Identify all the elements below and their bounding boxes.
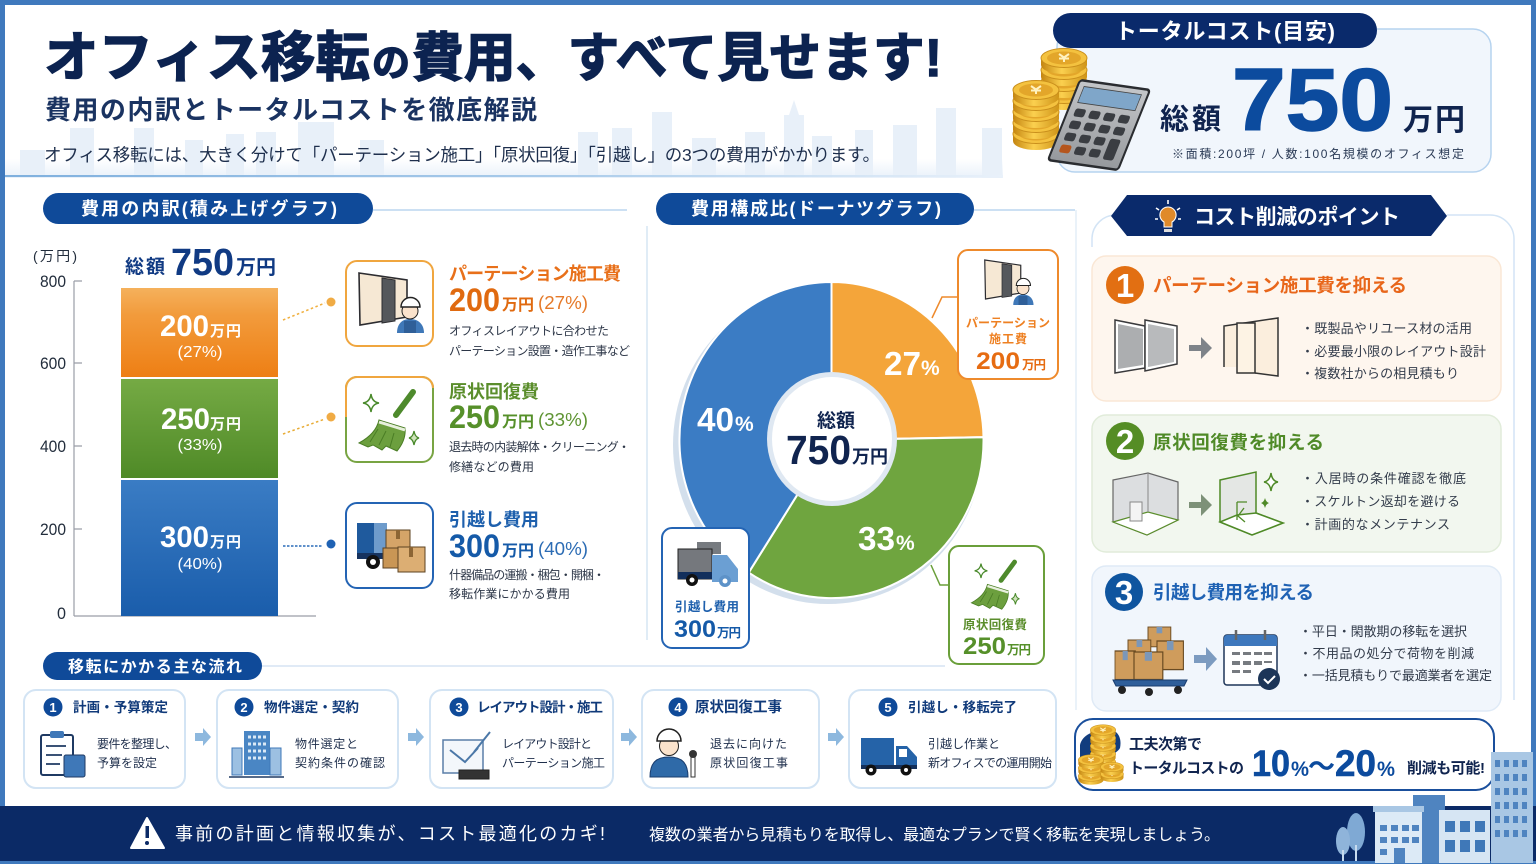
callout: 10 to 20 percent savings: 工夫次第で	[1129, 735, 1202, 753]
donut center total: 万円	[852, 447, 888, 467]
icon: calculator	[1048, 80, 1150, 170]
tip 2: restoration: ・スケルトン返却を避ける	[1301, 494, 1460, 509]
title	[44, 28, 942, 88]
donut center total	[786, 410, 888, 473]
footer bar: 複数の業者から見積もりを取得し、最適なプランで賢く移転を実現しましょう。	[649, 826, 1220, 844]
callout: 10 to 20 percent savings: %	[1291, 758, 1309, 781]
donut label 40%	[697, 401, 754, 438]
bar: restoration 250: 250	[161, 403, 210, 436]
title: オフィス移転	[44, 28, 370, 88]
chart axis	[33, 248, 316, 623]
callout: restoration: 250	[963, 633, 1006, 660]
donut label 33%: 33	[858, 520, 895, 557]
tip 3: moving: ・平日・閑散期の移転を選択	[1299, 624, 1467, 639]
flow step 2: 物件選定と	[295, 737, 358, 751]
icon: boxes on cart	[1113, 627, 1187, 696]
flow step 3	[430, 690, 613, 788]
icon: blueprint	[443, 732, 490, 779]
callout: moving: 300	[674, 616, 716, 643]
callout: partition	[932, 250, 1058, 379]
tip 3: moving	[1092, 566, 1501, 711]
donut center total: 750	[786, 427, 851, 473]
icon: worker	[650, 729, 697, 777]
donut center total: 総額	[817, 410, 855, 432]
icon: truck and boxes	[346, 503, 433, 588]
total cost heading pill: トータルコスト(目安)	[1115, 19, 1335, 44]
panel: total cost	[1013, 13, 1491, 172]
flow step 2: 物件選定・契約	[264, 699, 359, 715]
item: restoration cost: 修繕などの費用	[449, 459, 534, 474]
chart axis: 400	[40, 437, 66, 456]
flow step 2	[217, 690, 398, 788]
callout: partition: 200	[976, 348, 1020, 375]
callout: 10 to 20 percent savings: 10	[1252, 743, 1290, 784]
tip 2: restoration	[1092, 415, 1501, 552]
item: moving cost: (40%)	[538, 539, 588, 559]
item: moving cost: 300	[449, 528, 500, 564]
item: moving cost	[346, 503, 605, 601]
donut label 33%: %	[896, 532, 915, 555]
flow step 5: 5	[884, 700, 892, 715]
donut chart	[673, 282, 984, 604]
tip 1: partition: パーテーション施工費を抑える	[1153, 275, 1407, 296]
icon: coins	[1013, 48, 1087, 150]
callout: moving: 万円	[717, 626, 741, 640]
tip 1: partition: ・複数社からの相見積もり	[1301, 366, 1459, 381]
bar: moving 300: (40%)	[178, 556, 222, 573]
callout: 10 to 20 percent savings: トータルコストの	[1129, 760, 1244, 777]
flow step 1: 計画・予算策定	[73, 699, 168, 715]
stacked bar chart	[33, 242, 316, 623]
bar: restoration 250: 万円	[210, 416, 241, 433]
icon: arrow	[1194, 647, 1217, 671]
item: restoration cost: 原状回復費	[449, 382, 539, 402]
item: restoration cost: (33%)	[538, 410, 588, 430]
tip 1: partition: 1	[1116, 267, 1134, 304]
chart total: 750	[171, 242, 234, 284]
callout: restoration: 万円	[1007, 643, 1031, 657]
icon: coin stacks	[1078, 725, 1124, 785]
chart axis: 200	[40, 520, 66, 539]
tip 3: moving: 引越し費用を抑える	[1153, 582, 1314, 603]
flow step 3: レイアウト設計・施工	[477, 699, 603, 715]
icon: door and worker	[346, 261, 433, 346]
bar: restoration 250: (33%)	[178, 437, 222, 454]
item: partition cost: パーテーション施工費	[449, 264, 621, 284]
bar: restoration 250	[121, 379, 278, 478]
callout: partition: パーテーション	[966, 316, 1050, 330]
panel: cost reduction points	[1092, 195, 1514, 711]
footer bar: 事前の計画と情報収集が、コスト最適化のカギ!	[175, 824, 605, 844]
intro text: オフィス移転には、大きく分けて「パーテーション施工」「原状回復」「引越し」の3つの費用がかかります。	[44, 145, 880, 165]
bar: partition 200	[121, 288, 278, 377]
icon: panels to door	[1115, 318, 1278, 376]
item: moving cost: 引越し費用	[449, 510, 539, 530]
callout: restoration: 原状回復費	[963, 617, 1027, 632]
flow step 1: 要件を整理し、	[97, 737, 177, 751]
bar: partition 200: 万円	[210, 323, 241, 340]
tip 3: moving: ・一括見積もりで最適業者を選定	[1299, 668, 1492, 683]
tip 3: moving: ・不用品の処分で荷物を削減	[1299, 646, 1474, 661]
flow step 1: 1	[49, 700, 57, 715]
item: moving cost: 什器備品の運搬・梱包・開梱・	[449, 567, 605, 582]
footer city illustration	[1336, 752, 1533, 863]
callout: moving	[662, 528, 749, 648]
item: partition cost	[346, 261, 630, 358]
callout: 10 to 20 percent savings: 削減も可能!	[1407, 759, 1485, 777]
callout: 10 to 20 percent savings: %	[1377, 758, 1395, 781]
donut label 27%: %	[921, 357, 940, 380]
item: partition cost: パーテーション設置・造作工事など	[449, 344, 630, 358]
tip 2: restoration: 原状回復費を抑える	[1153, 432, 1324, 453]
chart total: 万円	[236, 257, 276, 279]
chart axis: 0	[57, 604, 66, 623]
chart axis: 600	[40, 354, 66, 373]
chart axis: (万円)	[33, 248, 77, 264]
icon: truck	[861, 738, 917, 776]
flow arrow 2	[408, 728, 424, 746]
callout: partition: 施工費	[989, 331, 1027, 346]
callout: 10 to 20 percent savings	[1075, 719, 1494, 790]
tip 2: restoration: ・計画的なメンテナンス	[1301, 517, 1450, 532]
flow step 4: 原状回復工事	[710, 755, 788, 770]
bar: partition 200: 200	[160, 310, 209, 343]
flow step 5	[849, 690, 1056, 788]
heading: stacked chart: 費用の内訳(積み上げグラフ)	[81, 198, 337, 219]
item: restoration cost: 退去時の内装解体・クリーニング・	[449, 440, 630, 454]
total amount	[1160, 50, 1465, 149]
tip 1: partition	[1092, 256, 1501, 401]
flow step 2: 2	[240, 700, 248, 715]
flow step 1: 予算を設定	[97, 755, 157, 770]
callout: 10 to 20 percent savings: 〜	[1308, 752, 1335, 782]
item: restoration cost: 250	[449, 399, 500, 435]
flow step 3: パーテーション施工	[502, 756, 605, 770]
donut label 33%	[858, 520, 915, 557]
icon: broom	[346, 377, 433, 462]
item: restoration cost: 万円	[502, 414, 534, 431]
bar: moving 300	[121, 480, 278, 616]
heading: donut chart: 費用構成比(ドーナツグラフ)	[691, 198, 941, 219]
icon: calendar with check	[1224, 630, 1280, 690]
heading: relocation flow: 移転にかかる主な流れ	[68, 657, 242, 676]
item: partition cost: (27%)	[538, 293, 588, 313]
chart total: 総額	[125, 256, 165, 278]
callout: partition: 万円	[1022, 358, 1046, 372]
heading: donut chart	[647, 193, 1076, 710]
total amount: 万円	[1403, 104, 1465, 137]
icon: room to clean room	[1113, 472, 1283, 535]
callout: 10 to 20 percent savings: 20	[1335, 743, 1376, 784]
total cost note: ※面積:200坪 / 人数:100名規模のオフィス想定	[1172, 146, 1464, 161]
item: partition cost: 200	[449, 282, 500, 318]
icon: warning triangle	[131, 818, 164, 848]
total cost heading pill	[1053, 13, 1377, 48]
donut label 27%: 27	[884, 345, 921, 382]
flow step 3: レイアウト設計と	[502, 736, 592, 751]
flow step 3: 3	[455, 700, 463, 715]
icon: office building	[229, 731, 284, 777]
total amount: 750	[1232, 50, 1393, 149]
subtitle: 費用の内訳とトータルコストを徹底解説	[45, 95, 537, 125]
item: moving cost: 移転作業にかかる費用	[449, 586, 570, 601]
footer bar	[0, 752, 1536, 864]
icon: clipboard and calculator	[41, 731, 85, 777]
callout: restoration	[931, 546, 1044, 664]
bar: partition 200: (27%)	[178, 344, 222, 361]
header skyline background	[5, 100, 1003, 178]
item: partition cost: 万円	[502, 297, 534, 314]
title: 費用、すべて見せます!	[412, 29, 942, 88]
flow step 5: 引越し・移転完了	[908, 699, 1017, 715]
flow step 2: 契約条件の確認	[295, 755, 385, 770]
title: の	[372, 43, 410, 85]
tip 1: partition: ・必要最小限のレイアウト設計	[1301, 344, 1486, 359]
bar: moving 300: 万円	[210, 534, 241, 551]
item: restoration cost	[346, 377, 630, 474]
chart axis: 800	[40, 272, 66, 291]
cost reduction heading: コスト削減のポイント	[1194, 205, 1400, 229]
tip 3: moving: 3	[1115, 574, 1133, 611]
icon: light bulb	[1155, 200, 1181, 232]
flow step 1	[24, 690, 185, 788]
tip 2: restoration: ・入居時の条件確認を徹底	[1301, 471, 1466, 486]
flow step 4: 原状回復工事	[695, 698, 782, 716]
flow step 4: 退去に向けた	[710, 736, 787, 751]
bar: moving 300: 300	[160, 521, 209, 554]
flow step 4	[642, 690, 819, 788]
total amount: 総額	[1160, 103, 1221, 136]
flow arrow 4	[828, 728, 844, 746]
flow arrow 3	[621, 728, 637, 746]
heading: stacked chart	[43, 193, 627, 224]
flow step 4: 4	[674, 700, 682, 715]
item: moving cost: 万円	[502, 543, 534, 560]
cost reduction heading	[1111, 195, 1447, 236]
donut label 27%	[884, 345, 940, 382]
item: partition cost: オフィスレイアウトに合わせた	[449, 324, 609, 338]
flow arrow 1	[195, 728, 211, 746]
donut label 40%: 40	[697, 401, 734, 438]
chart total	[125, 242, 276, 284]
tip 1: partition: ・既製品やリユース材の活用	[1301, 321, 1472, 336]
tip 2: restoration: 2	[1116, 423, 1134, 460]
callout: moving: 引越し費用	[675, 599, 739, 614]
donut label 40%: %	[735, 413, 754, 436]
flow step 5: 新オフィスでの運用開始	[928, 756, 1052, 770]
connectors	[283, 298, 336, 548]
heading: relocation flow	[43, 652, 945, 680]
flow step 5: 引越し作業と	[928, 737, 1000, 751]
